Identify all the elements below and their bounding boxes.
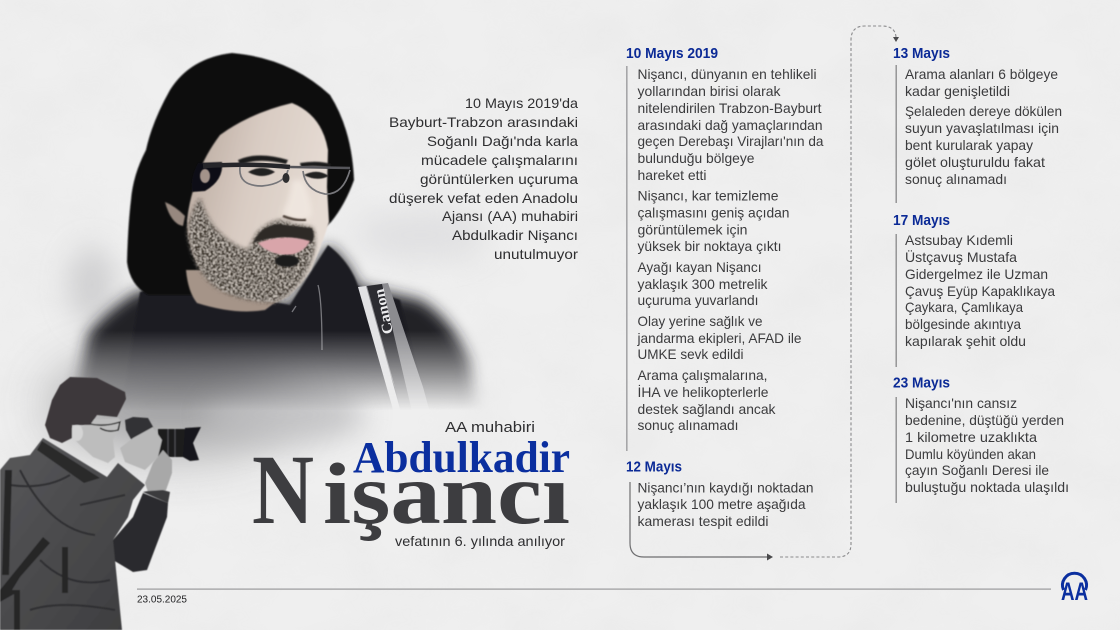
- entry: 10 Mayıs 2019: destek sağlandı ancak: [638, 401, 776, 417]
- entry: 23 Mayıs: çayın Soğanlı Deresi ile: [905, 462, 1049, 478]
- date: 23.05.2025: [137, 594, 187, 606]
- photographer: jacket folds: [10, 470, 125, 610]
- portrait photo of Abdulkadir Nişancı: [70, 53, 478, 420]
- intro paragraph: mücadele çalışmalarını: [421, 152, 578, 168]
- intro paragraph: düşerek vefat eden Anadolu: [389, 190, 578, 206]
- entry: 10 Mayıs 2019: Arama çalışmalarına,: [638, 367, 768, 383]
- portrait: ear: [165, 202, 185, 226]
- entry: 10 Mayıs 2019: jandarma ekipleri, AFAD ile: [637, 330, 802, 346]
- entry: 23 Mayıs: 1 kilometre uzaklıkta: [905, 429, 1037, 445]
- entry: 13 Mayıs: Şelaleden dereye dökülen: [905, 103, 1062, 119]
- entry: 13 Mayıs: bent kurularak yapay: [905, 137, 1033, 153]
- portrait: eyebrows: [238, 156, 331, 168]
- arrowhead: [893, 37, 899, 42]
- entry: 17 Mayıs: Üstçavuş Mustafa: [905, 248, 1017, 265]
- portrait: beard: [188, 198, 315, 302]
- portrait: lips: [258, 237, 310, 255]
- entry: 12 Mayıs: Nişancı’nın kaydığı noktadan: [638, 480, 814, 496]
- icon: Anadolu Agency logo: [1061, 573, 1088, 606]
- eyebrow: AA muhabiri: AA muhabiri: [445, 419, 535, 436]
- photographer: lower hand: [145, 450, 172, 493]
- portrait: jacket and camera strap: [70, 245, 478, 420]
- entry: 10 Mayıs 2019: 10 Mayıs 2019: [626, 46, 718, 62]
- portrait: face: [187, 103, 329, 302]
- entry: 10 Mayıs 2019: yaklaşık 300 metrelik: [638, 276, 768, 292]
- footer rule: [137, 588, 1051, 590]
- entry: 10 Mayıs 2019: UMKE sevk edildi: [638, 346, 744, 362]
- icon: Anadolu Agency logo: AA: [1061, 578, 1088, 606]
- portrait: Canon strap text: Canon: [372, 286, 397, 335]
- entry: 17 Mayıs: 17 Mayıs: [893, 213, 950, 229]
- entry: 13 Mayıs: suyun yavaşlatılması için: [905, 120, 1059, 136]
- portrait: eyes: [248, 168, 329, 179]
- timeline connector arrows: [630, 26, 899, 560]
- entry: 12 Mayıs: yaklaşık 100 metre aşağıda: [638, 496, 806, 512]
- photographer: glasses: [90, 422, 120, 431]
- name: Nişancı: işancı: [323, 445, 570, 542]
- entry: 10 Mayıs 2019: sonuç alınamadı: [638, 417, 738, 433]
- entry: 23 Mayıs: buluştuğu noktada ulaşıldı: [905, 479, 1069, 495]
- entry: 17 Mayıs: bölgesinde akıntıya: [905, 316, 1021, 332]
- entry: 23 Mayıs: Nişancı'nın cansız: [905, 395, 1017, 411]
- entry: 10 Mayıs 2019: Nişancı, dünyanın en tehlikeli: [638, 66, 816, 82]
- name: Nişancı: N: [252, 434, 314, 545]
- portrait: temple hair lock: [192, 162, 222, 192]
- entry: 23 Mayıs: bedenine, düştüğü yerden: [905, 412, 1064, 428]
- photographer with camera: [0, 377, 201, 630]
- portrait: hoodie strings: [292, 285, 322, 350]
- solid connector from 12 Mayıs: [630, 482, 768, 557]
- dashed connector to 13 Mayıs: [780, 26, 896, 557]
- photographer: shoulder strap: [0, 470, 68, 630]
- portrait: neck: [186, 270, 285, 311]
- entry: 13 Mayıs: sonuç alınamadı: [905, 171, 1007, 187]
- entry: 23 Mayıs: [893, 376, 1069, 503]
- photographer: jacket: [0, 438, 145, 630]
- entry: 17 Mayıs: [893, 213, 1055, 367]
- photographer: ear: [71, 425, 83, 441]
- entry: 13 Mayıs: 13 Mayıs: [893, 46, 950, 62]
- intro paragraph: Ajansı (AA) muhabiri: [442, 208, 578, 224]
- intro paragraph: Bayburt-Trabzon arasındaki: [389, 114, 578, 130]
- portrait: hair: [127, 53, 354, 295]
- photographer: cuff: [143, 490, 170, 503]
- title block: [252, 419, 570, 549]
- portrait: glasses: [203, 165, 350, 194]
- intro paragraph: [389, 95, 578, 262]
- entry: 10 Mayıs 2019: uçuruma yuvarlandı: [638, 292, 758, 308]
- entry: 17 Mayıs: kapılarak şehit oldu: [905, 333, 1026, 349]
- entry: 10 Mayıs 2019: görüntülemek için: [638, 222, 748, 238]
- entry: 12 Mayıs: [626, 460, 814, 529]
- entry: 13 Mayıs: gölet oluşturuldu fakat: [905, 154, 1045, 170]
- subtitle: vefatının 6. yılında anılıyor: [395, 533, 565, 549]
- photographer: face: [72, 418, 122, 463]
- photographer: camera lens: [158, 427, 201, 461]
- entry: 10 Mayıs 2019: çalışmasını geniş açıdan: [638, 204, 790, 220]
- entry: 17 Mayıs: Çavuş Eyüp Kapaklıkaya: [905, 283, 1055, 299]
- arrowhead: [767, 554, 773, 560]
- entry: 10 Mayıs 2019: yüksek bir noktaya çıktı: [638, 238, 782, 254]
- portrait: moustache: [253, 224, 314, 243]
- entry: 13 Mayıs: Arama alanları 6 bölgeye: [905, 66, 1058, 82]
- photographer: camera body: [125, 417, 156, 441]
- portrait: chin tuft: [275, 255, 299, 267]
- entry: 13 Mayıs: [893, 46, 1062, 203]
- entry: 23 Mayıs: Dumlu köyünden akan: [905, 446, 1036, 462]
- entry: 10 Mayıs 2019: nitelendirilen Trabzon-Bayburt: [638, 100, 822, 116]
- entry: 10 Mayıs 2019: [626, 46, 824, 451]
- entry: 10 Mayıs 2019: arasındaki dağ yamaçlarından: [638, 117, 822, 133]
- entry: 10 Mayıs 2019: İHA ve helikopterlerle: [638, 383, 769, 400]
- entry: 10 Mayıs 2019: Olay yerine sağlık ve: [638, 313, 763, 329]
- entry: 10 Mayıs 2019: geçen Derebaşı Virajları'nın da: [638, 133, 824, 149]
- intro paragraph: Abdulkadir Nişancı: [452, 227, 578, 243]
- name: Abdulkadir: Abdulkadir: [353, 433, 570, 482]
- entry: 10 Mayıs 2019: Ayağı kayan Nişancı: [638, 259, 762, 275]
- photographer: neck strap: [37, 441, 100, 483]
- timeline column 1: [626, 46, 824, 529]
- photographer: hair: [45, 377, 126, 443]
- entry: 17 Mayıs: Çaykara, Çamlıkaya: [905, 299, 1023, 315]
- entry: 10 Mayıs 2019: hareket etti: [638, 167, 706, 183]
- intro paragraph: 10 Mayıs 2019'da: [465, 95, 578, 111]
- entry: 17 Mayıs: Astsubay Kıdemli: [905, 232, 1013, 248]
- intro paragraph: unutulmuyor: [494, 246, 578, 262]
- timeline column 2: [893, 46, 1069, 503]
- entry: 10 Mayıs 2019: yollarından birisi olarak: [638, 83, 781, 99]
- entry: 10 Mayıs 2019: bulunduğu bölgeye: [638, 150, 755, 166]
- intro paragraph: görüntülerken uçuruma: [420, 171, 578, 187]
- photographer: upper hand: [120, 427, 162, 470]
- entry: 12 Mayıs: kamerası tespit edildi: [638, 513, 768, 529]
- entry: 13 Mayıs: kadar genişletildi: [905, 83, 1010, 99]
- entry: 12 Mayıs: 12 Mayıs: [626, 460, 682, 476]
- portrait: nose: [282, 180, 312, 221]
- entry: 17 Mayıs: Gidergelmez ile Uzman: [905, 266, 1048, 282]
- photographer: far forearm: [113, 493, 168, 572]
- intro paragraph: Soğanlı Dağı'nda karla: [427, 133, 578, 149]
- entry: 10 Mayıs 2019: Nişancı, kar temizleme: [638, 188, 779, 204]
- entry: 23 Mayıs: 23 Mayıs: [893, 376, 950, 392]
